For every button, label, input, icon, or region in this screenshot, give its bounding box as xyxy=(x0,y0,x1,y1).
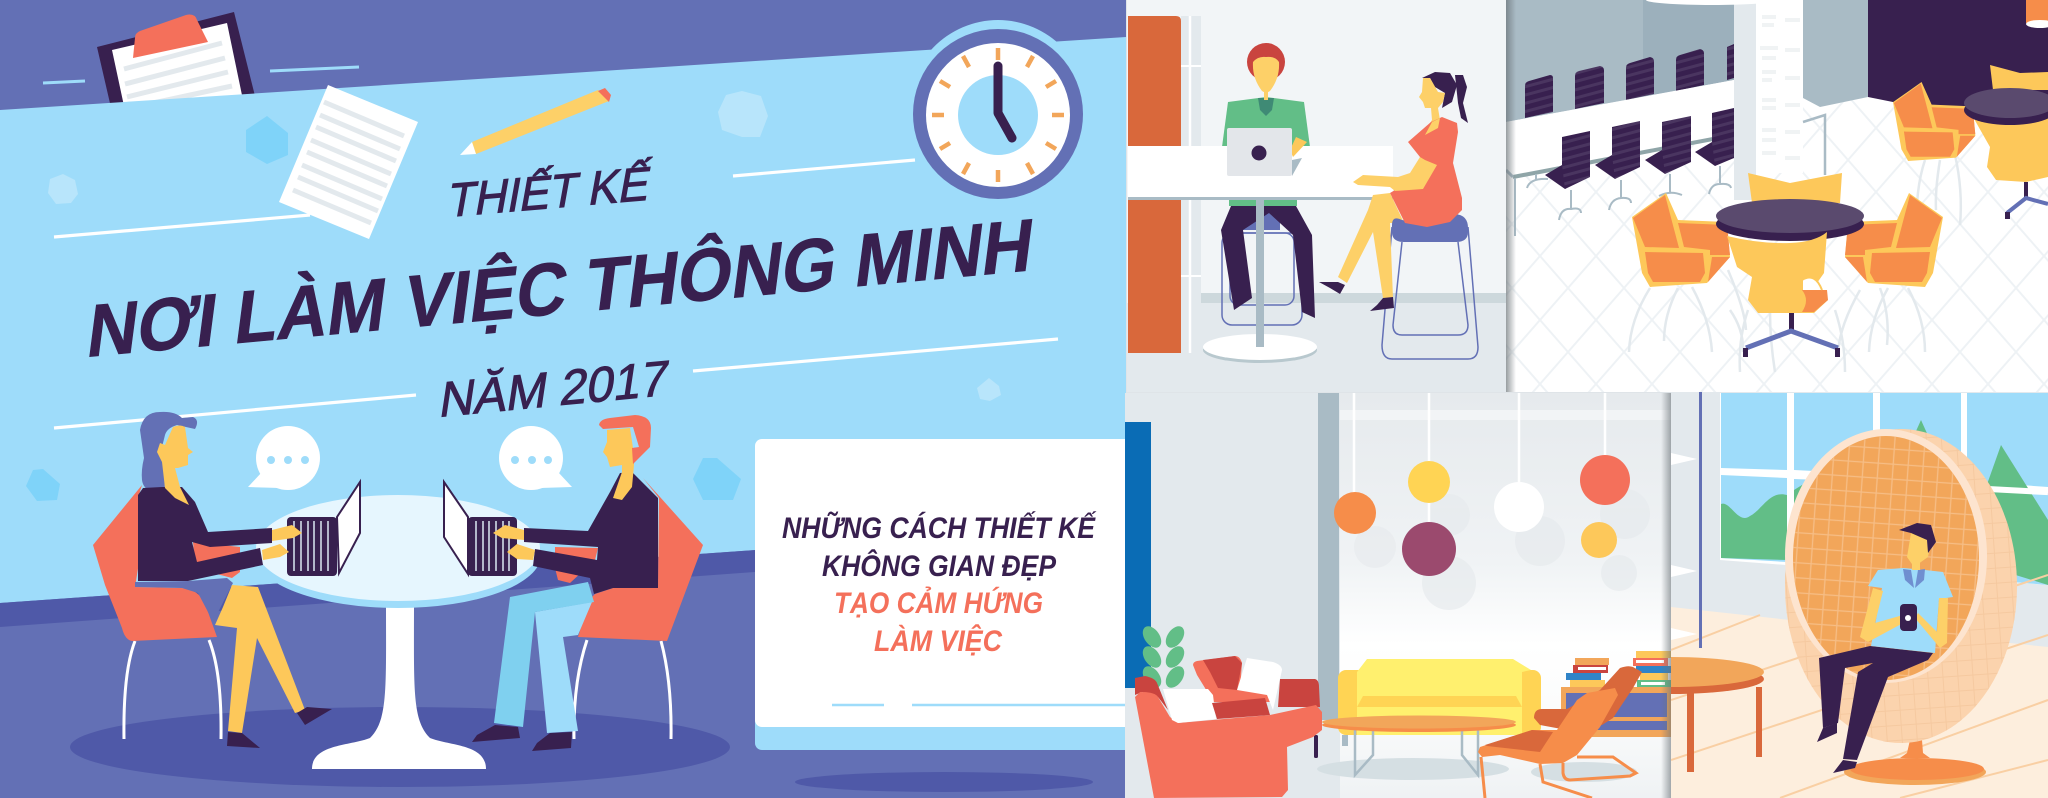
coffee table xyxy=(1322,716,1516,775)
lamp shadows xyxy=(1354,489,1650,610)
pendant lamps xyxy=(1334,393,1630,576)
card shadow xyxy=(795,772,1093,792)
back yellow chair xyxy=(1748,173,1842,203)
heading: NĂM 2017: NĂM 2017 xyxy=(436,349,673,428)
dark floor strip xyxy=(0,550,755,627)
heading: THIẾT KẾ: THIẾT KẾ xyxy=(444,157,655,228)
top-right lamp xyxy=(2026,0,2048,28)
egg chair stand xyxy=(1844,740,1986,785)
icon: pencil xyxy=(460,88,611,155)
table top xyxy=(1128,146,1393,363)
shadow on top panel seam xyxy=(1506,0,1516,392)
table xyxy=(255,495,541,769)
brick pillar xyxy=(1734,0,1803,200)
floor shadows xyxy=(1317,758,1509,780)
text: tagline line 3: TẠO CẢM HỨNG xyxy=(834,586,1043,620)
shadow at living room edge xyxy=(1661,393,1671,798)
plant xyxy=(1139,623,1188,691)
floor shadow ellipse xyxy=(70,707,730,787)
laptop xyxy=(1227,128,1307,176)
back wall xyxy=(1506,0,1734,122)
panel: hanging lamps living room xyxy=(1125,393,1671,798)
ceiling lamp xyxy=(1646,0,1756,5)
dark wall xyxy=(1868,0,2048,106)
floor planks xyxy=(1671,575,2048,798)
yellow sofa xyxy=(1338,659,1541,746)
orange lounge chair xyxy=(1478,666,1642,798)
man with phone xyxy=(1817,523,1953,773)
icon: clipboard xyxy=(97,12,256,112)
round side table xyxy=(1578,657,1764,772)
man seated at table xyxy=(1221,43,1315,325)
panel: isometric lounge xyxy=(1506,0,2048,392)
back row of chairs xyxy=(1525,44,1734,118)
panel: title banner xyxy=(0,0,1135,798)
round table top xyxy=(1716,199,1864,241)
egg chair xyxy=(1785,428,2018,743)
decorative white lines xyxy=(54,160,1058,428)
woman seated on stool xyxy=(1319,72,1478,359)
back armchair xyxy=(1193,656,1320,758)
icon: clock xyxy=(913,20,1083,199)
right chair group xyxy=(1893,65,2048,230)
right-top orange chair xyxy=(1893,82,1975,161)
card with tagline xyxy=(755,439,1135,750)
right orange chair xyxy=(1845,193,1943,287)
heading: NƠI LÀM VIỆC THÔNG MINH: NƠI LÀM VIỆC THÔNG MINH xyxy=(83,202,1039,373)
strip behind panels xyxy=(1126,0,2048,798)
wall post xyxy=(1699,392,1702,648)
side wall xyxy=(1803,0,1868,107)
side table edge xyxy=(1803,115,1825,175)
light blue diagonal band xyxy=(0,37,1126,603)
icon: paper sheet xyxy=(279,85,418,239)
panel: egg chair by window xyxy=(1578,392,2048,798)
text: tagline line 4: LÀM VIỆC xyxy=(874,624,1003,658)
icons: hexagons xyxy=(26,91,1001,501)
long white table xyxy=(1506,80,1734,236)
text: tagline line 1: NHỮNG CÁCH THIẾT KẾ xyxy=(782,511,1097,545)
orange wall partition xyxy=(1128,16,1201,353)
panel: bar table meeting xyxy=(1127,0,1506,392)
wall triangles xyxy=(1671,453,1697,640)
wire chair legs xyxy=(1629,270,1925,372)
floor xyxy=(1671,607,2048,798)
front yellow chair with base xyxy=(1727,232,1840,357)
man with chair and laptop xyxy=(444,415,703,751)
text: tagline line 2: KHÔNG GIAN ĐẸP xyxy=(822,549,1057,583)
front row of chairs xyxy=(1527,108,1734,220)
woman with chair and laptop xyxy=(93,412,360,748)
window xyxy=(1720,393,2048,585)
left orange chair xyxy=(1632,193,1730,287)
front red armchair xyxy=(1135,676,1322,798)
speech bubble right xyxy=(499,426,572,490)
speech bubble left xyxy=(248,426,320,490)
bookcase xyxy=(1561,651,1671,737)
